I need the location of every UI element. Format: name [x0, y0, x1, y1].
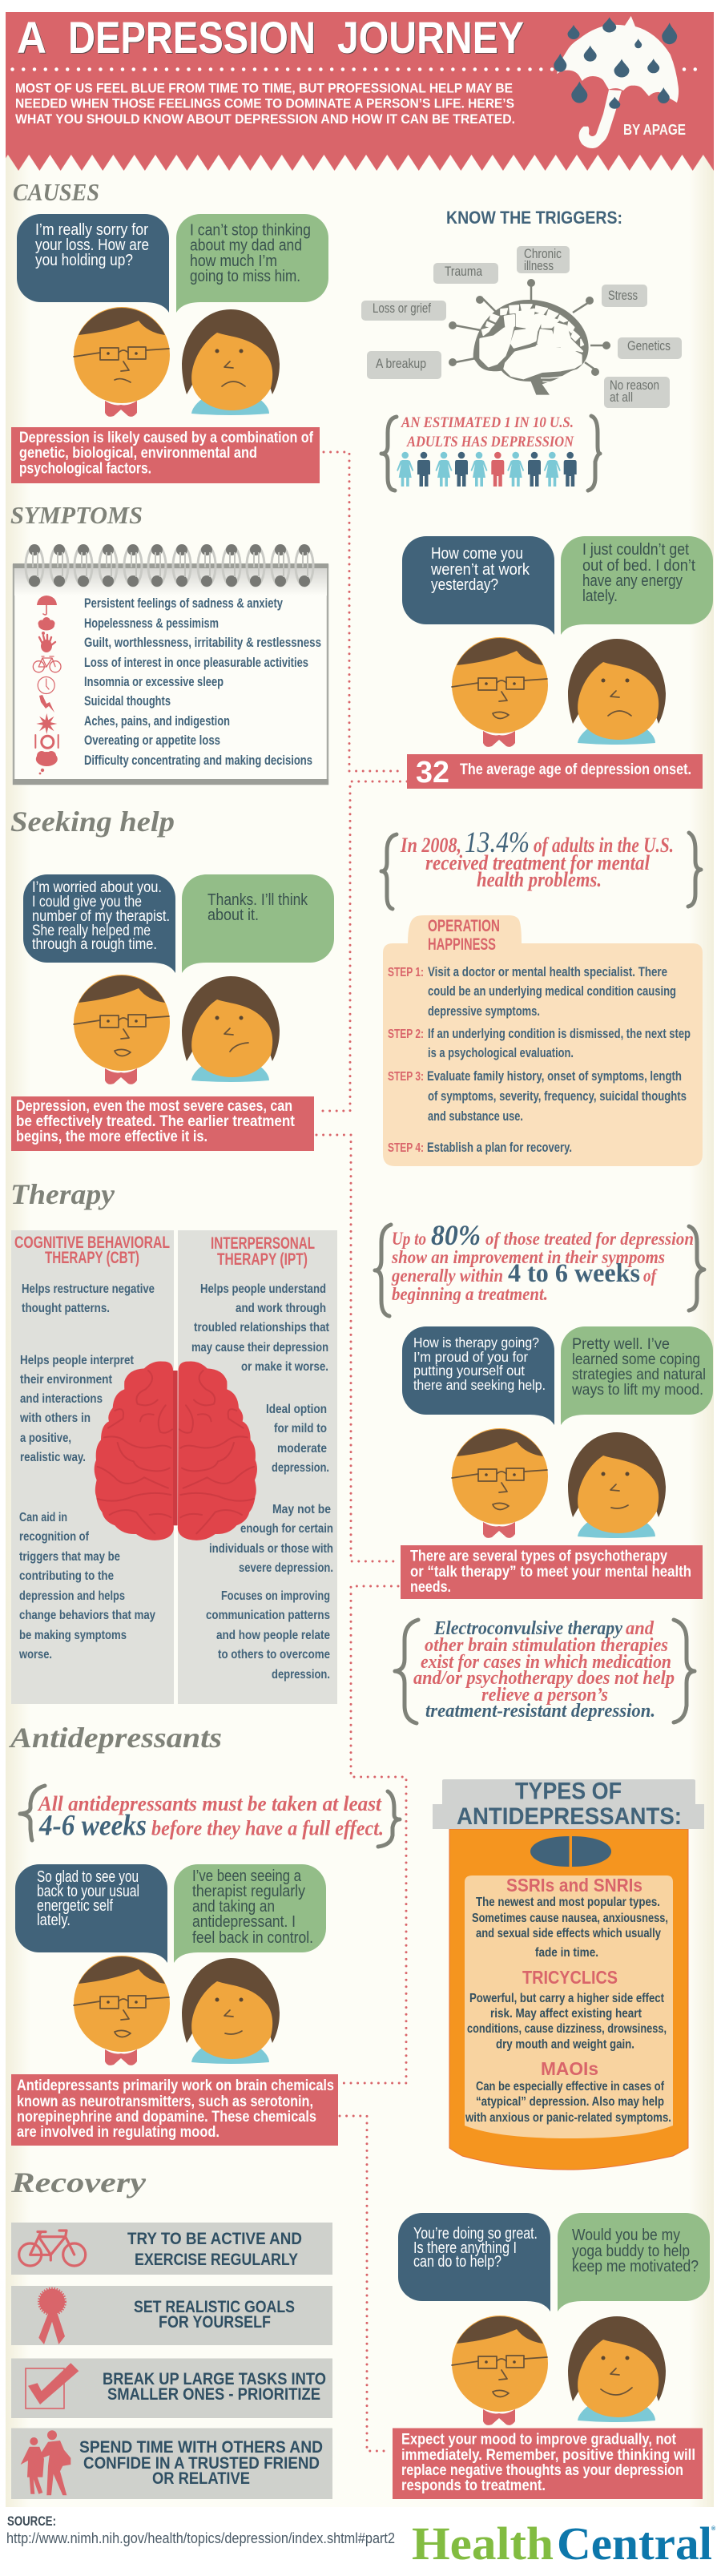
symptom 4: Loss of interest in once pleasurable activities: [84, 656, 308, 670]
panel: interpersonal therapy: THERAPY (IPT): [217, 1250, 308, 1269]
icon: hand: [39, 635, 55, 652]
speech bubble: green therapy: strategies and natural: [572, 1367, 706, 1383]
panel: cognitive behavioral therapy: THERAPY (CBT): [45, 1249, 139, 1267]
maois: MAOIs: [541, 2058, 598, 2079]
red box: average age 32: [407, 754, 703, 789]
panel: cognitive behavioral therapy: worse.: [18, 1648, 52, 1661]
callout: electroconvulsive therapy: Electroconvulsive therapy: [433, 1618, 622, 1639]
trigger: loss or grief: Loss or grief: [373, 301, 431, 316]
tricyclics: Powerful, but carry a higher side effect: [469, 1992, 665, 2005]
symptom 1: Persistent feelings of sadness & anxiety: [84, 596, 284, 611]
symptom 8: Overeating or appetite loss: [84, 733, 220, 748]
panel: operation happiness: [383, 915, 703, 1166]
red box: antidepressants: are involved in regulating mood.: [17, 2123, 220, 2141]
callout: 80% improvement: of: [643, 1266, 658, 1286]
red box: recovery: [393, 2429, 703, 2499]
step 1: depressive symptoms.: [428, 1004, 540, 1019]
panel: cognitive behavioral therapy: triggers that may be: [19, 1550, 120, 1564]
callout: electroconvulsive therapy: treatment-resistant depression.: [425, 1701, 655, 1722]
speech bubble: blue recovery: Is there anything I: [413, 2239, 517, 2257]
callout: 13.4% of adults: In 2008,: [400, 834, 461, 857]
callout: 13.4% of adults: 13.4%: [465, 826, 530, 859]
speech bubble: blue therapy: How is therapy going?: [413, 1334, 539, 1351]
heading: antidepressants: Antidepressants: [9, 1722, 222, 1754]
speech bubble: blue antidepressants: energetic self: [37, 1897, 113, 1915]
trigger: trauma: Trauma: [445, 264, 483, 279]
step 4: STEP 4:: [388, 1141, 424, 1155]
speech bubble: green causes: how much I’m: [190, 252, 277, 270]
speech bubble: blue therapy: there and seeking help.: [413, 1377, 546, 1393]
icon: two people: [21, 2430, 70, 2495]
recovery item: others: CONFIDE IN A TRUSTED FRIEND: [83, 2454, 320, 2473]
panel: operation happiness: HAPPINESS: [428, 935, 496, 954]
panel: interpersonal therapy: to others to overcome: [218, 1648, 330, 1661]
speech bubble: green causes: about my dad and: [190, 237, 302, 255]
callout: 80% improvement: Up to: [392, 1229, 426, 1249]
panel: interpersonal therapy: moderate: [277, 1442, 327, 1456]
panel: notebook symptoms: [13, 544, 328, 785]
speech bubble: green seeking help: about it.: [207, 906, 259, 924]
speech bubble: green antidepressants: and taking an: [192, 1898, 275, 1916]
panel: cognitive behavioral therapy: with others in: [19, 1411, 91, 1425]
callout: 1 in 10 adults: [381, 414, 600, 491]
speech bubble: blue antidepressants: back to your usual: [37, 1883, 139, 1900]
symptom 7: Aches, pains, and indigestion: [84, 714, 230, 729]
panel: cognitive behavioral therapy: depression and helps: [19, 1589, 125, 1603]
maois: [465, 2058, 671, 2125]
title: DEPRESSION: [68, 12, 316, 63]
step 1: Visit a doctor or mental health specialist. There: [428, 965, 667, 979]
tricyclics: conditions, cause dizziness, drowsiness,: [467, 2022, 667, 2036]
red box: therapy: needs.: [410, 1578, 451, 1596]
panel: cognitive behavioral therapy: realistic way.: [20, 1451, 86, 1464]
character: man recovery: [452, 2316, 548, 2425]
speech bubble: blue symptoms: weren’t at work: [430, 561, 530, 579]
speech bubble: green therapy: ways to lift my mood.: [571, 1382, 703, 1399]
trigger: loss or grief: [361, 301, 446, 321]
recovery item: tasks: BREAK UP LARGE TASKS INTO: [103, 2370, 326, 2388]
character: woman causes: [182, 309, 280, 415]
speech bubble: blue therapy: putting yourself out: [413, 1363, 525, 1379]
intro text: NEEDED WHEN THOSE FEELINGS COME TO DOMINATE A PERSON’S LIFE. HERE’S: [15, 96, 514, 111]
speech bubble: blue seeking help: through a rough time.: [32, 936, 157, 953]
recovery item: others: SPEND TIME WITH OTHERS AND: [79, 2438, 323, 2457]
panel: cognitive behavioral therapy: change behaviors that may: [19, 1609, 155, 1622]
speech bubble: blue symptoms: [402, 536, 554, 635]
speech bubble: green symptoms: out of bed. I don’t: [582, 557, 695, 575]
panel: cognitive behavioral therapy: [11, 1230, 174, 1704]
speech bubble: blue antidepressants: So glad to see you: [37, 1868, 139, 1886]
maois: “atypical” depression. Also may help: [476, 2095, 664, 2109]
header banner: [6, 12, 714, 171]
callout: 1 in 10 adults: AN ESTIMATED 1 IN 10 U.S.: [401, 414, 574, 431]
ssris: [472, 1875, 668, 1960]
bottle body: [449, 1829, 688, 2170]
speech bubble: green therapy: Pretty well. I’ve: [572, 1336, 670, 1353]
speech bubble: green therapy: [561, 1326, 713, 1425]
callout: electroconvulsive therapy: [395, 1618, 695, 1723]
recovery item: active: [11, 2223, 332, 2275]
character: man causes: [74, 307, 170, 417]
callout: 80% improvement: 4 to 6 weeks: [508, 1259, 640, 1288]
step 3: [388, 1069, 687, 1124]
speech bubble: blue seeking help: I could give you the: [32, 894, 142, 910]
panel: interpersonal therapy: may cause their depression: [191, 1341, 328, 1355]
recovery item: tasks: SMALLER ONES - PRIORITIZE: [107, 2385, 320, 2404]
ssris: Sometimes cause nausea, anxiousness,: [472, 1912, 668, 1925]
logo: healthcentral: Health: [412, 2517, 554, 2570]
character: woman symptoms: [568, 639, 666, 745]
icon: red brain: [95, 1362, 257, 1540]
panel: interpersonal therapy: severe depression.: [239, 1561, 333, 1575]
callout: 80% improvement: [375, 1219, 704, 1316]
icon: checkbox: [26, 2363, 79, 2408]
speech bubble: green antidepressants: therapist regularly: [192, 1883, 305, 1900]
callout: electroconvulsive therapy: other brain stimulation therapies: [425, 1635, 668, 1656]
character: woman therapy: [568, 1432, 666, 1538]
callout: 4-6 weeks: All antidepressants must be taken at least: [37, 1792, 382, 1815]
step 3: STEP 3:: [388, 1070, 424, 1084]
callout: 4-6 weeks: 4-6 weeks: [38, 1810, 147, 1842]
icon: umbrella with rain drops: [554, 16, 679, 148]
red box: antidepressants: Antidepressants primarily work on brain chemicals: [17, 2077, 334, 2094]
character: woman recovery: [568, 2316, 666, 2422]
title: JOURNEY: [337, 12, 524, 63]
speech bubble: blue causes: I’m really sorry for: [35, 221, 148, 239]
icon: plate: [35, 735, 58, 748]
recovery item: others: OR RELATIVE: [152, 2469, 250, 2488]
icon: rain cloud: [38, 617, 54, 635]
step 2: is a psychological evaluation.: [428, 1046, 574, 1060]
character: woman seeking help: [182, 976, 280, 1082]
source: [6, 2513, 395, 2546]
callout: 13.4% of adults: of adults in the U.S.: [534, 834, 674, 857]
speech bubble: blue antidepressants: [15, 1864, 167, 1963]
speech bubble: green causes: going to miss him.: [190, 268, 300, 285]
red box: average age 32: 32: [416, 756, 449, 789]
red box: causes: genetic, biological, environmental and: [19, 444, 257, 462]
speech bubble: green symptoms: have any energy: [582, 572, 683, 590]
trigger: a breakup: [367, 351, 441, 379]
icon: umbrella: [37, 596, 57, 615]
callout: 80% improvement: beginning a treatment.: [392, 1284, 548, 1304]
speech bubble: blue seeking help: number of my therapist.: [32, 908, 170, 925]
panel: interpersonal therapy: May not be: [272, 1503, 331, 1516]
panel: interpersonal therapy: depression.: [272, 1668, 330, 1682]
red box: causes: [11, 427, 320, 483]
character: man seeking help: [74, 975, 170, 1084]
red box: causes: Depression is likely caused by a combination of: [19, 429, 313, 446]
red box: therapy: [401, 1545, 703, 1599]
heading: symptoms: SYMPTOMS: [10, 501, 143, 529]
symptom 2: Hopelessness & pessimism: [84, 616, 219, 631]
panel: interpersonal therapy: communication patterns: [206, 1609, 330, 1622]
trigger: trauma: [433, 263, 498, 284]
spiral binding: [26, 544, 313, 587]
panel: interpersonal therapy: for mild to: [274, 1422, 327, 1435]
step 3: and substance use.: [428, 1109, 523, 1124]
source: SOURCE:: [7, 2513, 56, 2529]
speech bubble: green seeking help: [182, 874, 334, 973]
panel: interpersonal therapy: and how people relate: [216, 1629, 330, 1642]
heading: therapy: Therapy: [10, 1178, 115, 1210]
panel: pill bottle types of antidepressants: [433, 1778, 704, 2170]
tricyclics: risk. May affect existing heart: [490, 2007, 642, 2021]
step 1: [388, 965, 676, 1019]
logo: healthcentral: [412, 2517, 716, 2570]
speech bubble: green recovery: keep me motivated?: [572, 2258, 699, 2275]
icon: brain with triggers spokes: [449, 279, 610, 395]
recovery item: goals: SET REALISTIC GOALS: [134, 2298, 295, 2316]
character: man antidepressants: [74, 1956, 170, 2065]
maois: Can be especially effective in cases of: [476, 2080, 665, 2094]
speech bubble: green recovery: Would you be my: [572, 2227, 680, 2244]
bottle label: [465, 1875, 673, 2138]
tricyclics: dry mouth and weight gain.: [496, 2037, 634, 2052]
character: woman antidepressants: [182, 1958, 280, 2064]
callout: 1 in 10 adults: ADULTS HAS DEPRESSION: [406, 434, 574, 450]
panel: interpersonal therapy: Ideal option: [266, 1403, 327, 1416]
trigger: no reason at all: [604, 377, 670, 408]
speech bubble: blue recovery: You’re doing so great.: [413, 2225, 538, 2243]
panel: interpersonal therapy: or make it worse.: [241, 1360, 328, 1374]
icon: clock: [38, 676, 54, 694]
callout: 4-6 weeks: [20, 1786, 400, 1847]
step 4: [388, 1141, 572, 1155]
trigger: no reason at all: at all: [610, 390, 633, 405]
red box: recovery: Expect your mood to improve gradually, not: [401, 2430, 676, 2448]
panel: interpersonal therapy: Helps people understand: [200, 1282, 326, 1296]
trigger: a breakup: A breakup: [376, 357, 426, 371]
symptom 9: Difficulty concentrating and making decisions: [84, 753, 312, 768]
speech bubble: green symptoms: [561, 536, 713, 635]
logo: healthcentral: ®: [711, 2526, 716, 2532]
panel: cognitive behavioral therapy: recognition of: [19, 1530, 90, 1544]
panel: cognitive behavioral therapy: and interactions: [20, 1392, 103, 1406]
recovery item: others: [11, 2429, 332, 2499]
speech bubble: green antidepressants: antidepressant. I: [192, 1913, 296, 1931]
speech bubble: green symptoms: I just couldn’t get: [582, 541, 689, 559]
intro text: MOST OF US FEEL BLUE FROM TIME TO TIME, BUT PROFESSIONAL HELP MAY BE: [15, 80, 513, 96]
speech bubble: green recovery: [558, 2213, 710, 2312]
panel: interpersonal therapy: enough for certain: [240, 1522, 333, 1536]
speech bubble: green causes: [176, 214, 328, 313]
bottle cap: ANTIDEPRESSANTS:: [457, 1803, 682, 1830]
speech bubble: blue seeking help: She really helped me: [32, 923, 151, 939]
callout: electroconvulsive therapy: and/or psychotherapy does not help: [413, 1668, 675, 1689]
step 2: STEP 2:: [388, 1028, 424, 1041]
panel: interpersonal therapy: and work through: [236, 1302, 326, 1315]
trigger: genetics: [618, 337, 682, 359]
recovery item: tasks: [11, 2358, 332, 2418]
red box: therapy: There are several types of psychotherapy: [410, 1547, 667, 1565]
title: A: [17, 12, 46, 63]
panel: cognitive behavioral therapy: Can aid in: [19, 1511, 67, 1524]
speech bubble: blue therapy: [402, 1326, 554, 1425]
speech bubble: blue therapy: I’m proud of you for: [413, 1349, 528, 1365]
panel: cognitive behavioral therapy: thought patterns.: [22, 1302, 110, 1315]
icon: bicycle: [19, 2231, 86, 2266]
speech bubble: blue causes: you holding up?: [35, 252, 133, 269]
icon: pill: [530, 1836, 611, 1867]
trigger: no reason at all: No reason: [610, 378, 659, 393]
callout: 80% improvement: generally within: [391, 1266, 503, 1286]
callout: electroconvulsive therapy: and: [626, 1618, 655, 1639]
symptom 3: Guilt, worthlessness, irritability & restlessness: [84, 636, 321, 650]
panel: operation happiness: OPERATION: [428, 917, 500, 935]
callout: 80% improvement: show an improvement in their sympoms: [391, 1247, 665, 1267]
ssris: The newest and most popular types.: [476, 1896, 660, 1909]
panel: cognitive behavioral therapy: be making symptoms: [19, 1629, 127, 1642]
speech bubble: blue seeking help: I’m worried about you.: [32, 879, 162, 896]
recovery item: goals: [11, 2286, 332, 2345]
heading: seeking help: Seeking help: [10, 806, 175, 838]
tricyclics: TRICYCLICS: [522, 1967, 618, 1988]
icon: bicycle: [33, 656, 61, 672]
step 2: [388, 1027, 691, 1060]
ssris: and sexual side effects which usually: [476, 1927, 661, 1940]
panel: cognitive behavioral therapy: COGNITIVE BEHAVIORAL: [14, 1233, 170, 1252]
panel: cognitive behavioral therapy: Helps people interpret: [20, 1354, 135, 1367]
trigger: chronic illness: Chronic: [524, 247, 562, 261]
callout: 4-6 weeks: before they have a full effect.: [151, 1816, 384, 1840]
intro text: WHAT YOU SHOULD KNOW ABOUT DEPRESSION AND HOW IT CAN BE TREATED.: [15, 111, 515, 127]
speech bubble: green seeking help: Thanks. I’ll think: [207, 891, 308, 909]
callout: 80% improvement: 80%: [431, 1219, 481, 1251]
panel: interpersonal therapy: INTERPERSONAL: [211, 1234, 315, 1253]
character: man therapy: [452, 1428, 548, 1538]
panel: interpersonal therapy: Focuses on improving: [221, 1589, 330, 1603]
panel: cognitive behavioral therapy: their environment: [20, 1373, 113, 1387]
pictogram: 10 people: [397, 452, 577, 487]
recovery item: goals: FOR YOURSELF: [159, 2313, 271, 2332]
trigger: stress: Stress: [608, 289, 638, 303]
speech bubble: green antidepressants: I’ve been seeing a: [192, 1867, 302, 1885]
speech bubble: blue symptoms: How come you: [431, 545, 523, 563]
red box: antidepressants: known as neurotransmitters, such as serotonin,: [17, 2093, 313, 2110]
dotted divider: [13, 67, 697, 71]
speech bubble: blue seeking help: [23, 874, 175, 973]
speech bubble: green symptoms: lately.: [582, 587, 618, 605]
icon: lightning: [39, 695, 54, 713]
panel: cognitive behavioral therapy: a positive,: [20, 1431, 71, 1445]
step 1: STEP 1:: [388, 966, 424, 979]
panel: interpersonal therapy: depression.: [272, 1461, 329, 1475]
icon: thought cloud: [36, 751, 58, 774]
trigger: genetics: Genetics: [627, 339, 671, 353]
ssris: fade in time.: [535, 1946, 598, 1960]
red box: antidepressants: norepinephrine and dopamine. These chemicals: [17, 2108, 316, 2126]
trigger: chronic illness: [517, 246, 570, 273]
speech bubble: blue recovery: [398, 2213, 550, 2312]
trigger: stress: [602, 285, 647, 307]
symptom 6: Suicidal thoughts: [84, 694, 171, 709]
red box: seeking help: [11, 1096, 314, 1151]
callout: 13.4% of adults: health problems.: [477, 868, 602, 891]
character: man symptoms: [452, 637, 548, 747]
title: [17, 12, 524, 63]
logo: healthcentral: Central: [557, 2517, 712, 2570]
red box: recovery: responds to treatment.: [401, 2477, 546, 2494]
red box: seeking help: begins, the more effective it is.: [16, 1128, 207, 1145]
speech bubble: green therapy: learned some coping: [572, 1351, 700, 1368]
red box: antidepressants: [11, 2074, 338, 2146]
panel: interpersonal therapy: troubled relationships that: [194, 1321, 330, 1334]
speech bubble: green antidepressants: feel back in control.: [192, 1929, 313, 1947]
callout: 13.4% of adults: [381, 826, 701, 909]
heading: causes: CAUSES: [13, 178, 99, 206]
panel: cognitive behavioral therapy: contributing to the: [19, 1569, 114, 1583]
trigger: chronic illness: illness: [524, 259, 554, 273]
bottle cap: TYPES OF: [515, 1778, 622, 1805]
panel: cognitive behavioral therapy: Helps restructure negative: [22, 1282, 155, 1296]
recovery item: active: EXERCISE REGULARLY: [135, 2251, 298, 2269]
byline: BY APAGE: [623, 122, 686, 138]
speech bubble: green antidepressants: [174, 1864, 326, 1963]
callout: 13.4% of adults: received treatment for mental: [425, 851, 651, 874]
speech bubble: green causes: I can’t stop thinking: [190, 221, 311, 239]
callout: electroconvulsive therapy: exist for cases in which medication: [421, 1652, 671, 1673]
icon: burst: [36, 713, 57, 734]
intro text: [15, 80, 515, 127]
tricyclics: [467, 1967, 667, 2052]
red box: seeking help: be effectively treated. The earlier treatment: [16, 1112, 295, 1130]
step 4: Establish a plan for recovery.: [427, 1141, 572, 1155]
bottle cap: [433, 1778, 704, 1830]
dotted connectors: [316, 452, 407, 2451]
symptom 5: Insomnia or excessive sleep: [84, 675, 224, 689]
icon: rosette: [38, 2288, 66, 2344]
red box: causes: psychological factors.: [19, 460, 151, 478]
heading: recovery: Recovery: [10, 2166, 147, 2198]
speech bubble: blue recovery: can do to help?: [413, 2253, 501, 2271]
callout: electroconvulsive therapy: relieve a person’s: [481, 1685, 608, 1706]
callout: 80% improvement: of those treated for depression: [485, 1229, 694, 1249]
panel: interpersonal therapy: individuals or those with: [209, 1542, 333, 1556]
speech bubble: green recovery: yoga buddy to help: [572, 2243, 690, 2260]
maois: with anxious or panic-related symptoms.: [465, 2111, 671, 2125]
speech bubble: blue causes: your loss. How are: [35, 236, 149, 254]
source: http://www.nimh.nih.gov/health/topics/depression/index.shtml#part2: [6, 2530, 395, 2546]
recovery item: active: TRY TO BE ACTIVE AND: [127, 2230, 302, 2248]
ssris: SSRIs and SNRIs: [506, 1875, 642, 1896]
red box: seeking help: Depression, even the most severe cases, can: [16, 1097, 292, 1115]
speech bubble: blue symptoms: yesterday?: [431, 576, 498, 594]
speech bubble: blue antidepressants: lately.: [37, 1912, 70, 1929]
panel: interpersonal therapy: [178, 1230, 337, 1704]
heading: know the triggers: KNOW THE TRIGGERS:: [446, 208, 622, 228]
speech bubble: blue causes: [17, 214, 169, 313]
